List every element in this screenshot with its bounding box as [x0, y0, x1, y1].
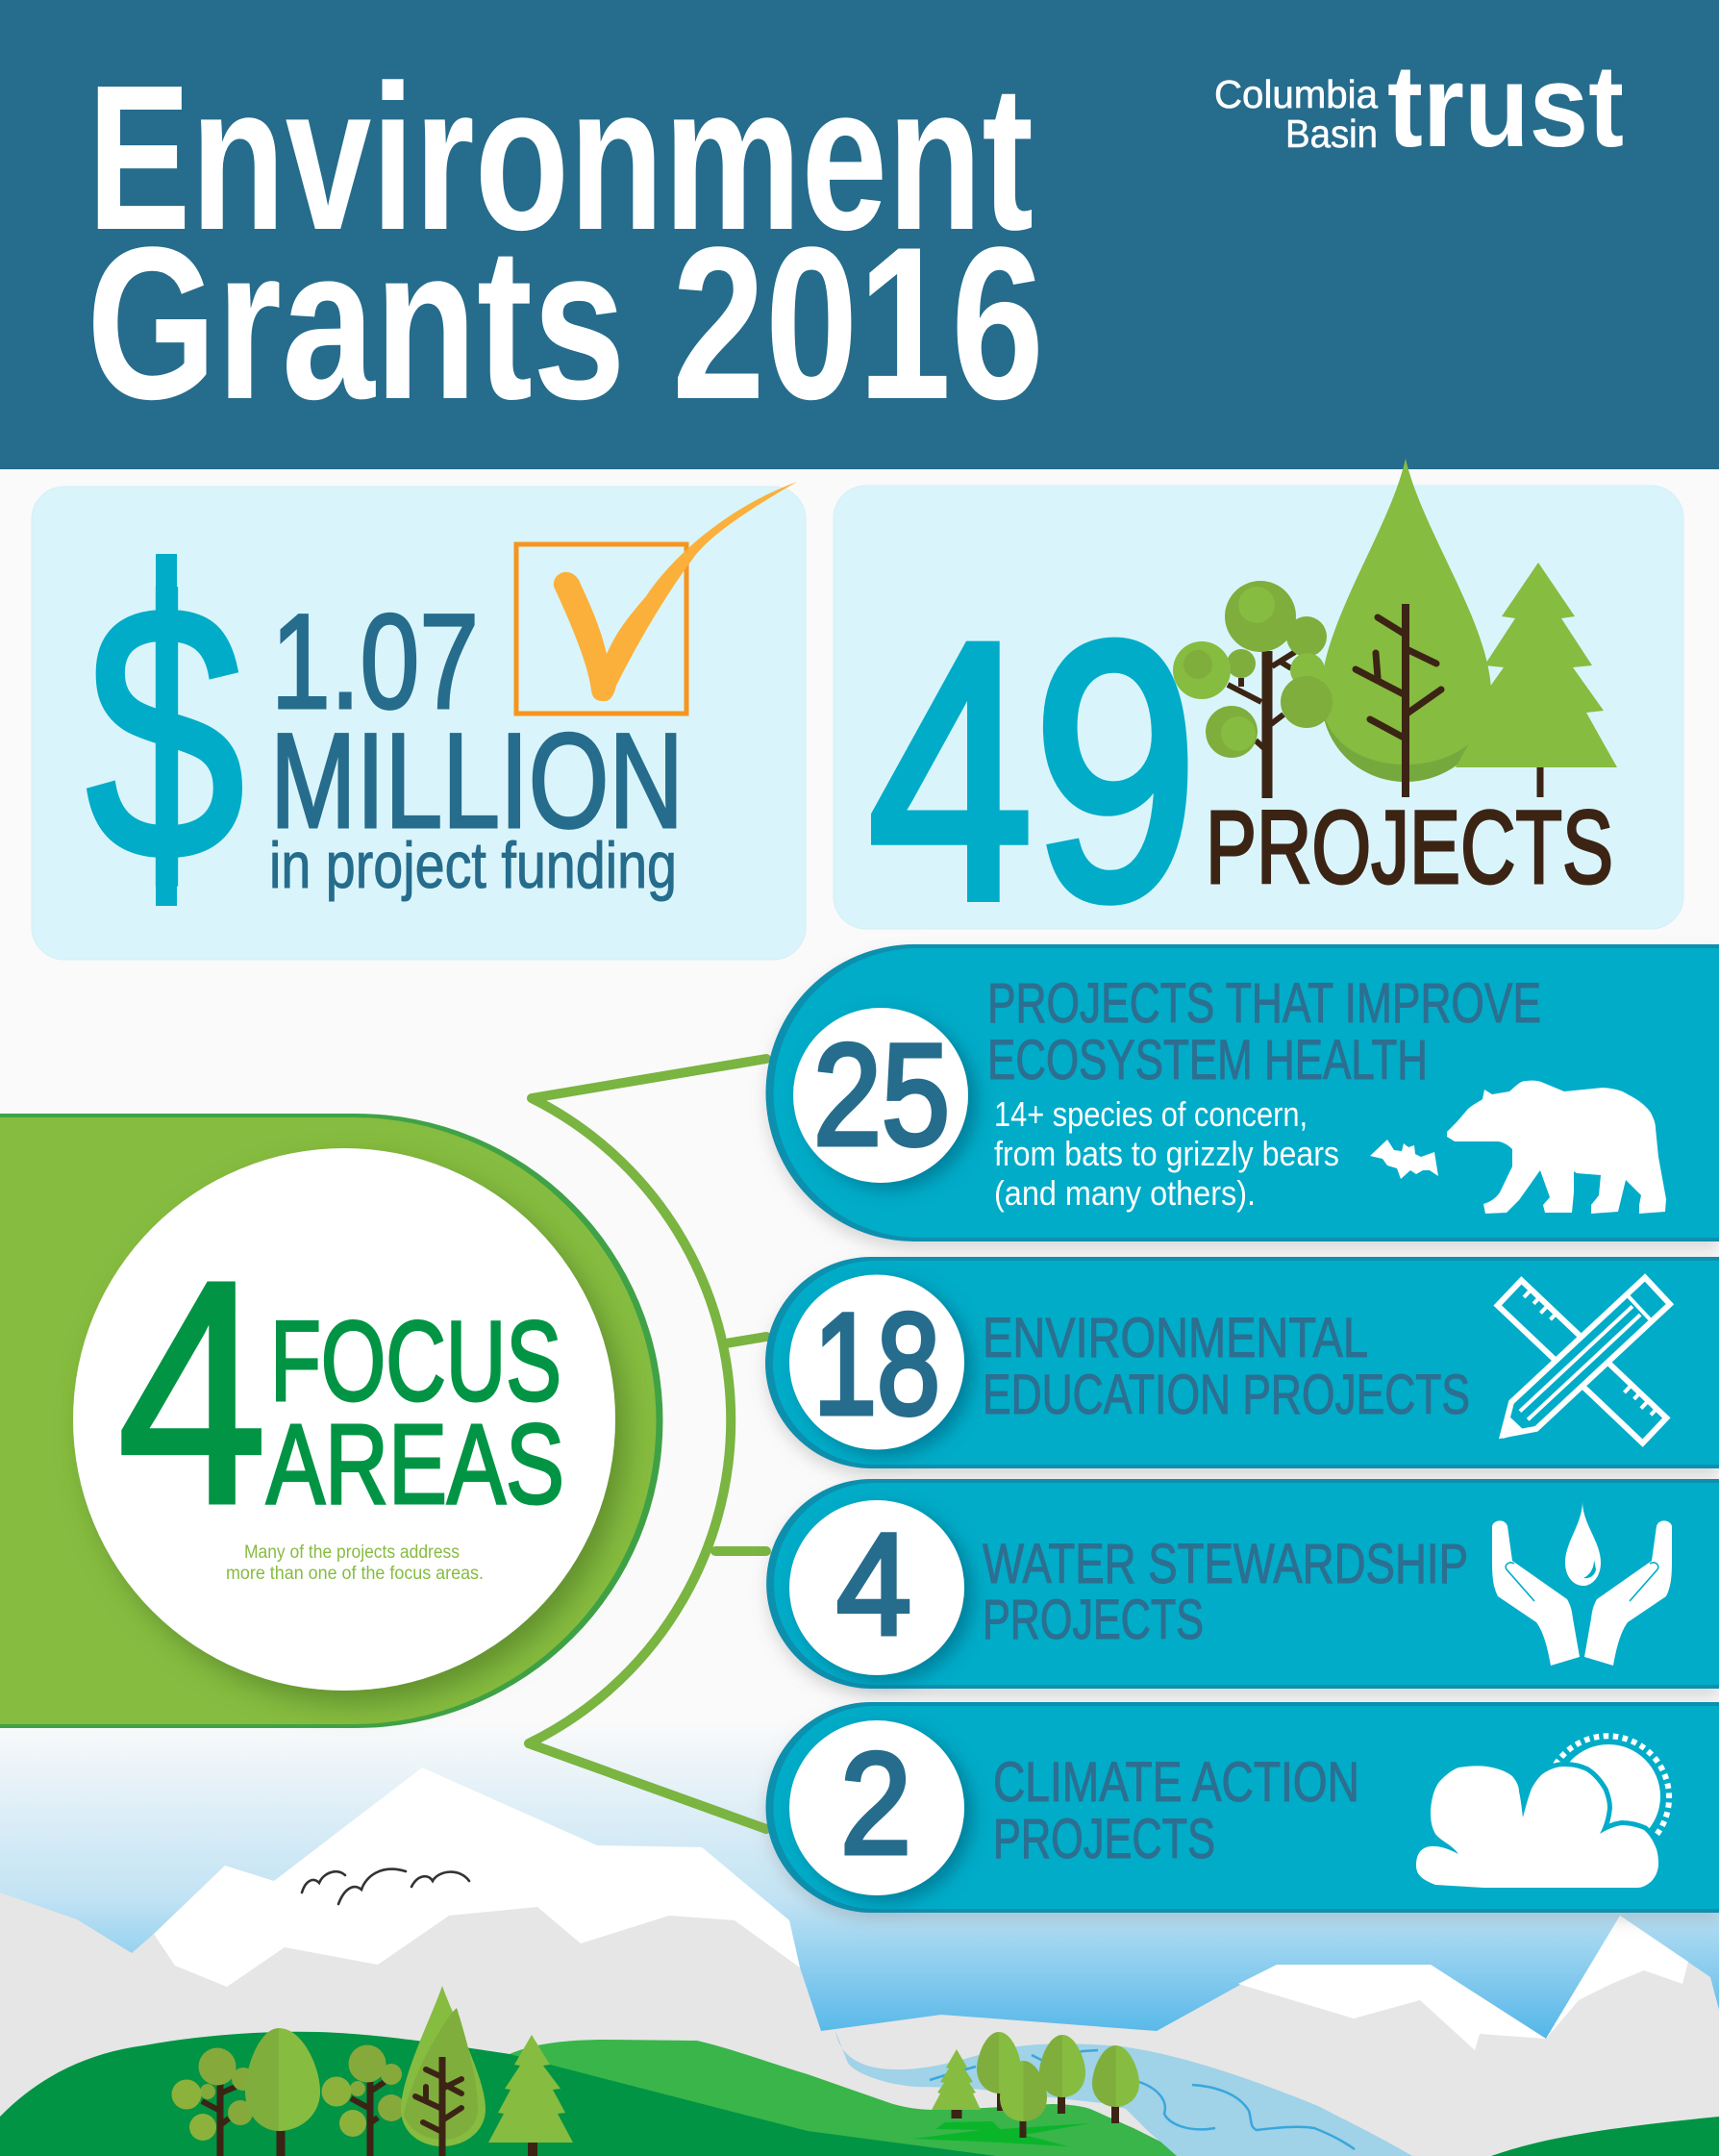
- white circle: [73, 1148, 615, 1691]
- bar: climate action: [765, 1702, 1719, 1913]
- heading: [983, 1307, 1470, 1426]
- landscape scene: [0, 1721, 1719, 2156]
- icon: bear: [1447, 1081, 1666, 1214]
- grey mountains: [0, 1767, 1719, 2156]
- sky gradient: [0, 1721, 1719, 2156]
- heading: ECOSYSTEM HEALTH: [987, 1029, 1428, 1091]
- species note: [994, 1094, 1339, 1213]
- logo: Columbia Basin Trust: [1214, 40, 1624, 171]
- tree A: [171, 2048, 255, 2156]
- number 18: 18: [813, 1283, 940, 1444]
- logo: Columbia Basin Trust: trust: [1387, 40, 1624, 171]
- bar: environmental education: [765, 1257, 1719, 1468]
- title: [87, 41, 1044, 444]
- title: Grants 2016: [87, 201, 1044, 444]
- snow caps: [154, 1767, 1688, 2050]
- river: [835, 2031, 1412, 2156]
- logo: Columbia Basin Trust: Columbia: [1214, 72, 1378, 116]
- focus areas heading: FOCUS: [270, 1298, 561, 1425]
- heading: [983, 1533, 1468, 1651]
- logo: Columbia Basin Trust: Basin: [1285, 112, 1378, 156]
- number 49: 49: [868, 566, 1198, 975]
- title: Environment: [87, 41, 1034, 273]
- heading: WATER STEWARDSHIP: [983, 1533, 1468, 1595]
- icon: round-leaf tree: [1173, 581, 1333, 798]
- icon: checkbox with check mark: [516, 482, 797, 714]
- funding amount: in project funding: [269, 829, 677, 902]
- focus areas note: more than one of the focus areas.: [226, 1564, 484, 1584]
- number circle: [793, 1008, 968, 1183]
- species note: from bats to grizzly bears: [994, 1134, 1339, 1173]
- heading: ENVIRONMENTAL: [983, 1307, 1368, 1369]
- dollar sign: $: [87, 531, 244, 935]
- tree C: [321, 2044, 405, 2156]
- number 2: 2: [840, 1722, 911, 1884]
- right tree group: [932, 2032, 1139, 2138]
- heading: EDUCATION PROJECTS: [983, 1364, 1470, 1426]
- birds: [302, 1869, 469, 1904]
- focus areas heading: [266, 1298, 564, 1528]
- heading: PROJECTS: [983, 1589, 1204, 1651]
- number 25: 25: [813, 1014, 950, 1175]
- tree E: [488, 2035, 573, 2156]
- heading: CLIMATE ACTION: [993, 1751, 1359, 1814]
- heading: PROJECTS THAT IMPROVE: [987, 972, 1541, 1035]
- big number 4: 4: [117, 1215, 267, 1569]
- species note: 14+ species of concern,: [994, 1094, 1308, 1134]
- header band: [0, 0, 1719, 469]
- heading: [987, 972, 1541, 1091]
- green tab: [0, 1114, 663, 1728]
- funding amount: MILLION: [270, 705, 684, 856]
- heading: [993, 1751, 1359, 1870]
- focus areas note: [226, 1542, 484, 1584]
- icon: hands holding water drop: [1492, 1501, 1672, 1666]
- icon: ruler and pencil: [1490, 1277, 1670, 1448]
- icon: drop-shaped tree: [1321, 459, 1491, 797]
- focus areas heading: AREAS: [266, 1401, 564, 1528]
- grass patch: [913, 2121, 1090, 2146]
- icon: pine tree: [1456, 563, 1617, 797]
- left tree group: [171, 1986, 573, 2156]
- panel: 4 focus areas: [0, 1114, 663, 1728]
- focus areas note: Many of the projects address: [244, 1542, 460, 1563]
- bar: ecosystem health: [766, 944, 1719, 1241]
- icon: cloud and sun: [1416, 1736, 1669, 1888]
- funding amount: [269, 586, 684, 902]
- panel: projects: [834, 459, 1683, 975]
- number 4: 4: [836, 1503, 911, 1665]
- bar: water stewardship: [766, 1479, 1719, 1689]
- connector lines: [529, 1059, 766, 1829]
- funding amount: 1.07: [271, 586, 479, 737]
- tree B: [245, 2028, 320, 2156]
- number circle: [789, 1720, 964, 1895]
- tree D: [401, 1986, 486, 2156]
- river lines: [930, 2050, 1355, 2149]
- species note: (and many others).: [994, 1173, 1256, 1213]
- green hills: [510, 2040, 1177, 2156]
- icon: bat: [1370, 1140, 1438, 1179]
- heading: PROJECTS: [993, 1808, 1215, 1870]
- number circle: [789, 1275, 964, 1450]
- panel: funding: [32, 482, 806, 960]
- number circle: [789, 1500, 964, 1675]
